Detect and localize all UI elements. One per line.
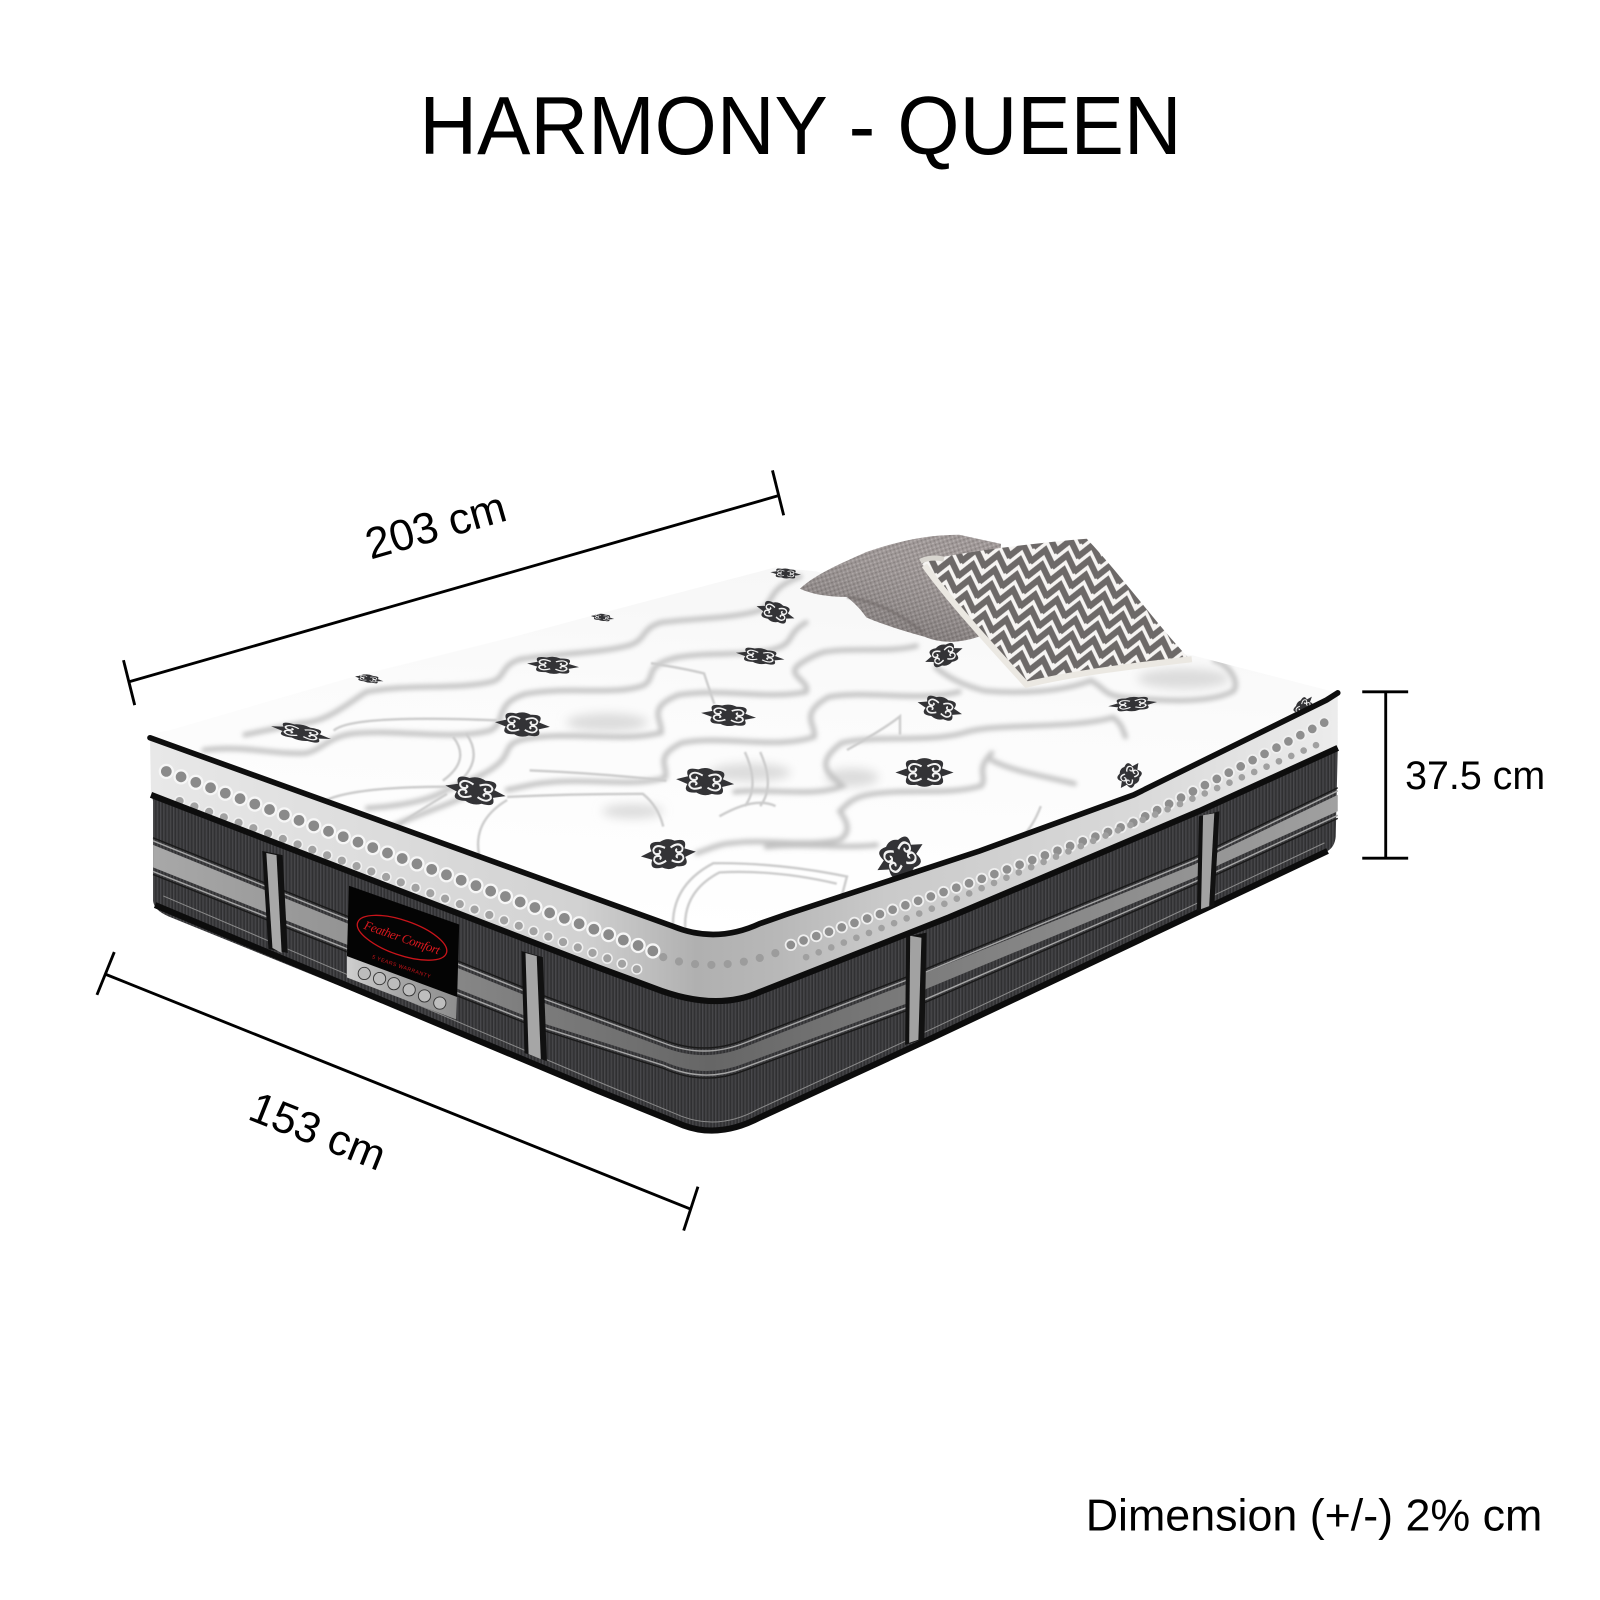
stitched lines (320, 663, 1041, 934)
carry handles (262, 811, 1219, 1061)
grey stripe around base (153, 788, 1338, 1078)
dimension: 203 cm length (123, 470, 784, 705)
top piping (150, 693, 1338, 935)
dimension: 153 cm width: 153 cm (242, 1083, 392, 1180)
label feature icons (358, 967, 446, 1009)
mattress (150, 535, 1338, 1131)
ornaments (269, 567, 1317, 886)
pillow hollows (566, 668, 1230, 818)
tolerance note: Dimension (+/-) 2% cm (1086, 1491, 1542, 1541)
perforated white border band (150, 693, 1338, 1000)
chevron pillow (920, 539, 1192, 687)
grey knit pillow (800, 535, 1001, 642)
dimension: 37.5 cm height: 37.5 cm (1405, 754, 1545, 798)
label logo: Feather Comfort (361, 918, 442, 958)
brand label (347, 886, 459, 1019)
title: HARMONY - QUEEN (419, 79, 1182, 172)
quilt channels (204, 577, 1235, 853)
label panel (347, 886, 459, 1019)
label warranty text: 5 YEARS WARRANTY (371, 954, 432, 980)
mattress base: dark knit side panels (151, 748, 1338, 1131)
quilted top surface (150, 567, 1338, 935)
dimension: 153 cm width (97, 952, 698, 1231)
dimension: 203 cm length: 203 cm (360, 482, 512, 569)
border piping (151, 748, 1338, 1001)
